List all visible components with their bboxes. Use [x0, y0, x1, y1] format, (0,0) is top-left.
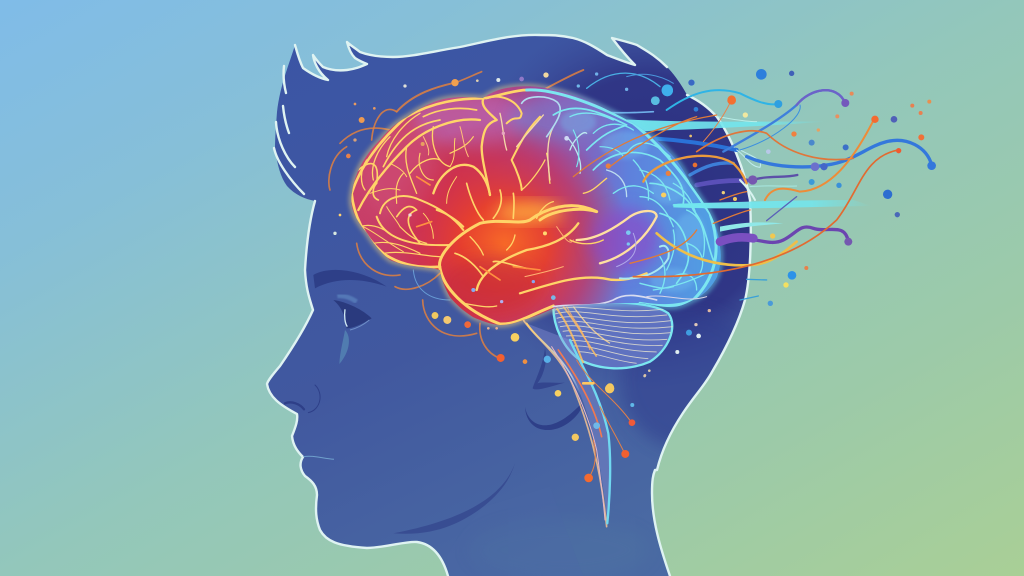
- neural streamers to right: [573, 90, 932, 300]
- back of head outline: [652, 95, 751, 576]
- face outline: [267, 201, 448, 576]
- particles around brain: [339, 72, 736, 391]
- brain cerebellum: [553, 302, 673, 368]
- purple wave: [720, 227, 848, 242]
- small sparks in brain: [408, 132, 670, 317]
- head silhouette: [268, 36, 750, 576]
- cerebellum folds: [555, 307, 673, 363]
- hair left strokes: [274, 66, 304, 194]
- extra right folds: [673, 183, 704, 290]
- eye: [333, 296, 372, 330]
- neck shade: [447, 487, 583, 576]
- neural filaments: forehead and crown: [329, 70, 583, 358]
- ear: [525, 348, 582, 430]
- brain cerebrum: [340, 80, 730, 330]
- front cyan beams: [673, 200, 872, 208]
- temporal lobe folds: [440, 206, 597, 268]
- particles right: [651, 69, 936, 306]
- mouth: [303, 456, 334, 459]
- eyebrow: [313, 270, 387, 288]
- particles lower: [333, 232, 651, 482]
- orange strands: [643, 156, 747, 183]
- head outline: [267, 35, 751, 576]
- left and frontal folds: [352, 90, 527, 193]
- extra frontal folds: [361, 113, 420, 190]
- nose: [285, 385, 320, 413]
- hair top outline: [295, 35, 667, 80]
- blue strands: [667, 90, 778, 110]
- back beams and blue strands behind brain: [573, 73, 827, 185]
- facial features: [285, 270, 582, 459]
- brain stem: [523, 320, 632, 527]
- under-eye light: [339, 330, 349, 364]
- brain gyri lines: [352, 90, 716, 324]
- jaw shadow: [393, 463, 515, 534]
- right side folds: [522, 90, 716, 307]
- lighter blue lobes: [560, 110, 706, 292]
